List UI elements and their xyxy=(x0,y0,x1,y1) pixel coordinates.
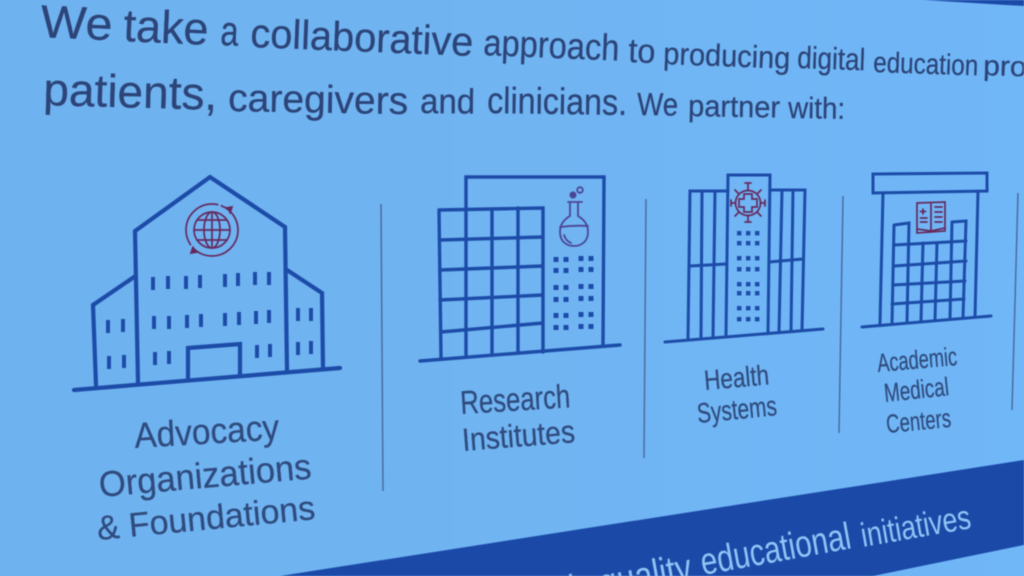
label: advocacy xyxy=(95,406,317,548)
label: research: Research xyxy=(459,377,571,421)
icon: virus with cross xyxy=(731,183,765,222)
label: research: Institutes xyxy=(461,413,576,458)
icon: research institute xyxy=(420,177,620,361)
band text xyxy=(568,510,972,576)
label: academic: Medical xyxy=(882,371,950,408)
label: health: Health xyxy=(703,359,770,396)
heading: a xyxy=(220,7,240,55)
bottom band xyxy=(280,460,1024,576)
heading: digital xyxy=(797,40,866,77)
label: health xyxy=(696,359,778,429)
heading: partner xyxy=(688,90,780,125)
heading: education xyxy=(873,47,979,82)
label: advocacy: Advocacy xyxy=(133,406,280,456)
top-right dark band xyxy=(923,0,1024,6)
heading: to xyxy=(628,32,656,71)
label: academic: Academic xyxy=(876,341,958,378)
band text: initiatives xyxy=(858,498,974,555)
heading: with: xyxy=(787,92,845,126)
heading: and xyxy=(420,82,475,122)
heading: caregivers xyxy=(228,77,409,123)
label: research xyxy=(459,377,576,458)
heading: producing xyxy=(663,36,791,76)
icon: flask xyxy=(560,187,588,246)
health windows xyxy=(737,231,759,321)
heading: clinicians. xyxy=(487,80,627,123)
heading: take xyxy=(123,0,210,55)
label: academic xyxy=(876,341,958,439)
label: advocacy: & Foundations xyxy=(95,489,317,548)
heading: patients, xyxy=(43,63,218,120)
label: academic: Centers xyxy=(885,403,952,439)
building windows xyxy=(108,272,311,369)
heading xyxy=(40,0,1024,126)
icon: open book xyxy=(917,202,945,233)
icon: academic medical center xyxy=(862,173,991,327)
label: advocacy: Organizations xyxy=(97,446,313,505)
research windows xyxy=(554,256,594,330)
icon: health system xyxy=(665,175,823,342)
icon: advocacy building xyxy=(74,177,340,390)
heading: collaborative xyxy=(250,10,474,65)
heading: We xyxy=(637,86,678,123)
heading: approach xyxy=(483,22,620,69)
divider lines xyxy=(381,193,1018,491)
icon: globe with arrows xyxy=(186,204,238,256)
label: health: Systems xyxy=(696,390,778,429)
